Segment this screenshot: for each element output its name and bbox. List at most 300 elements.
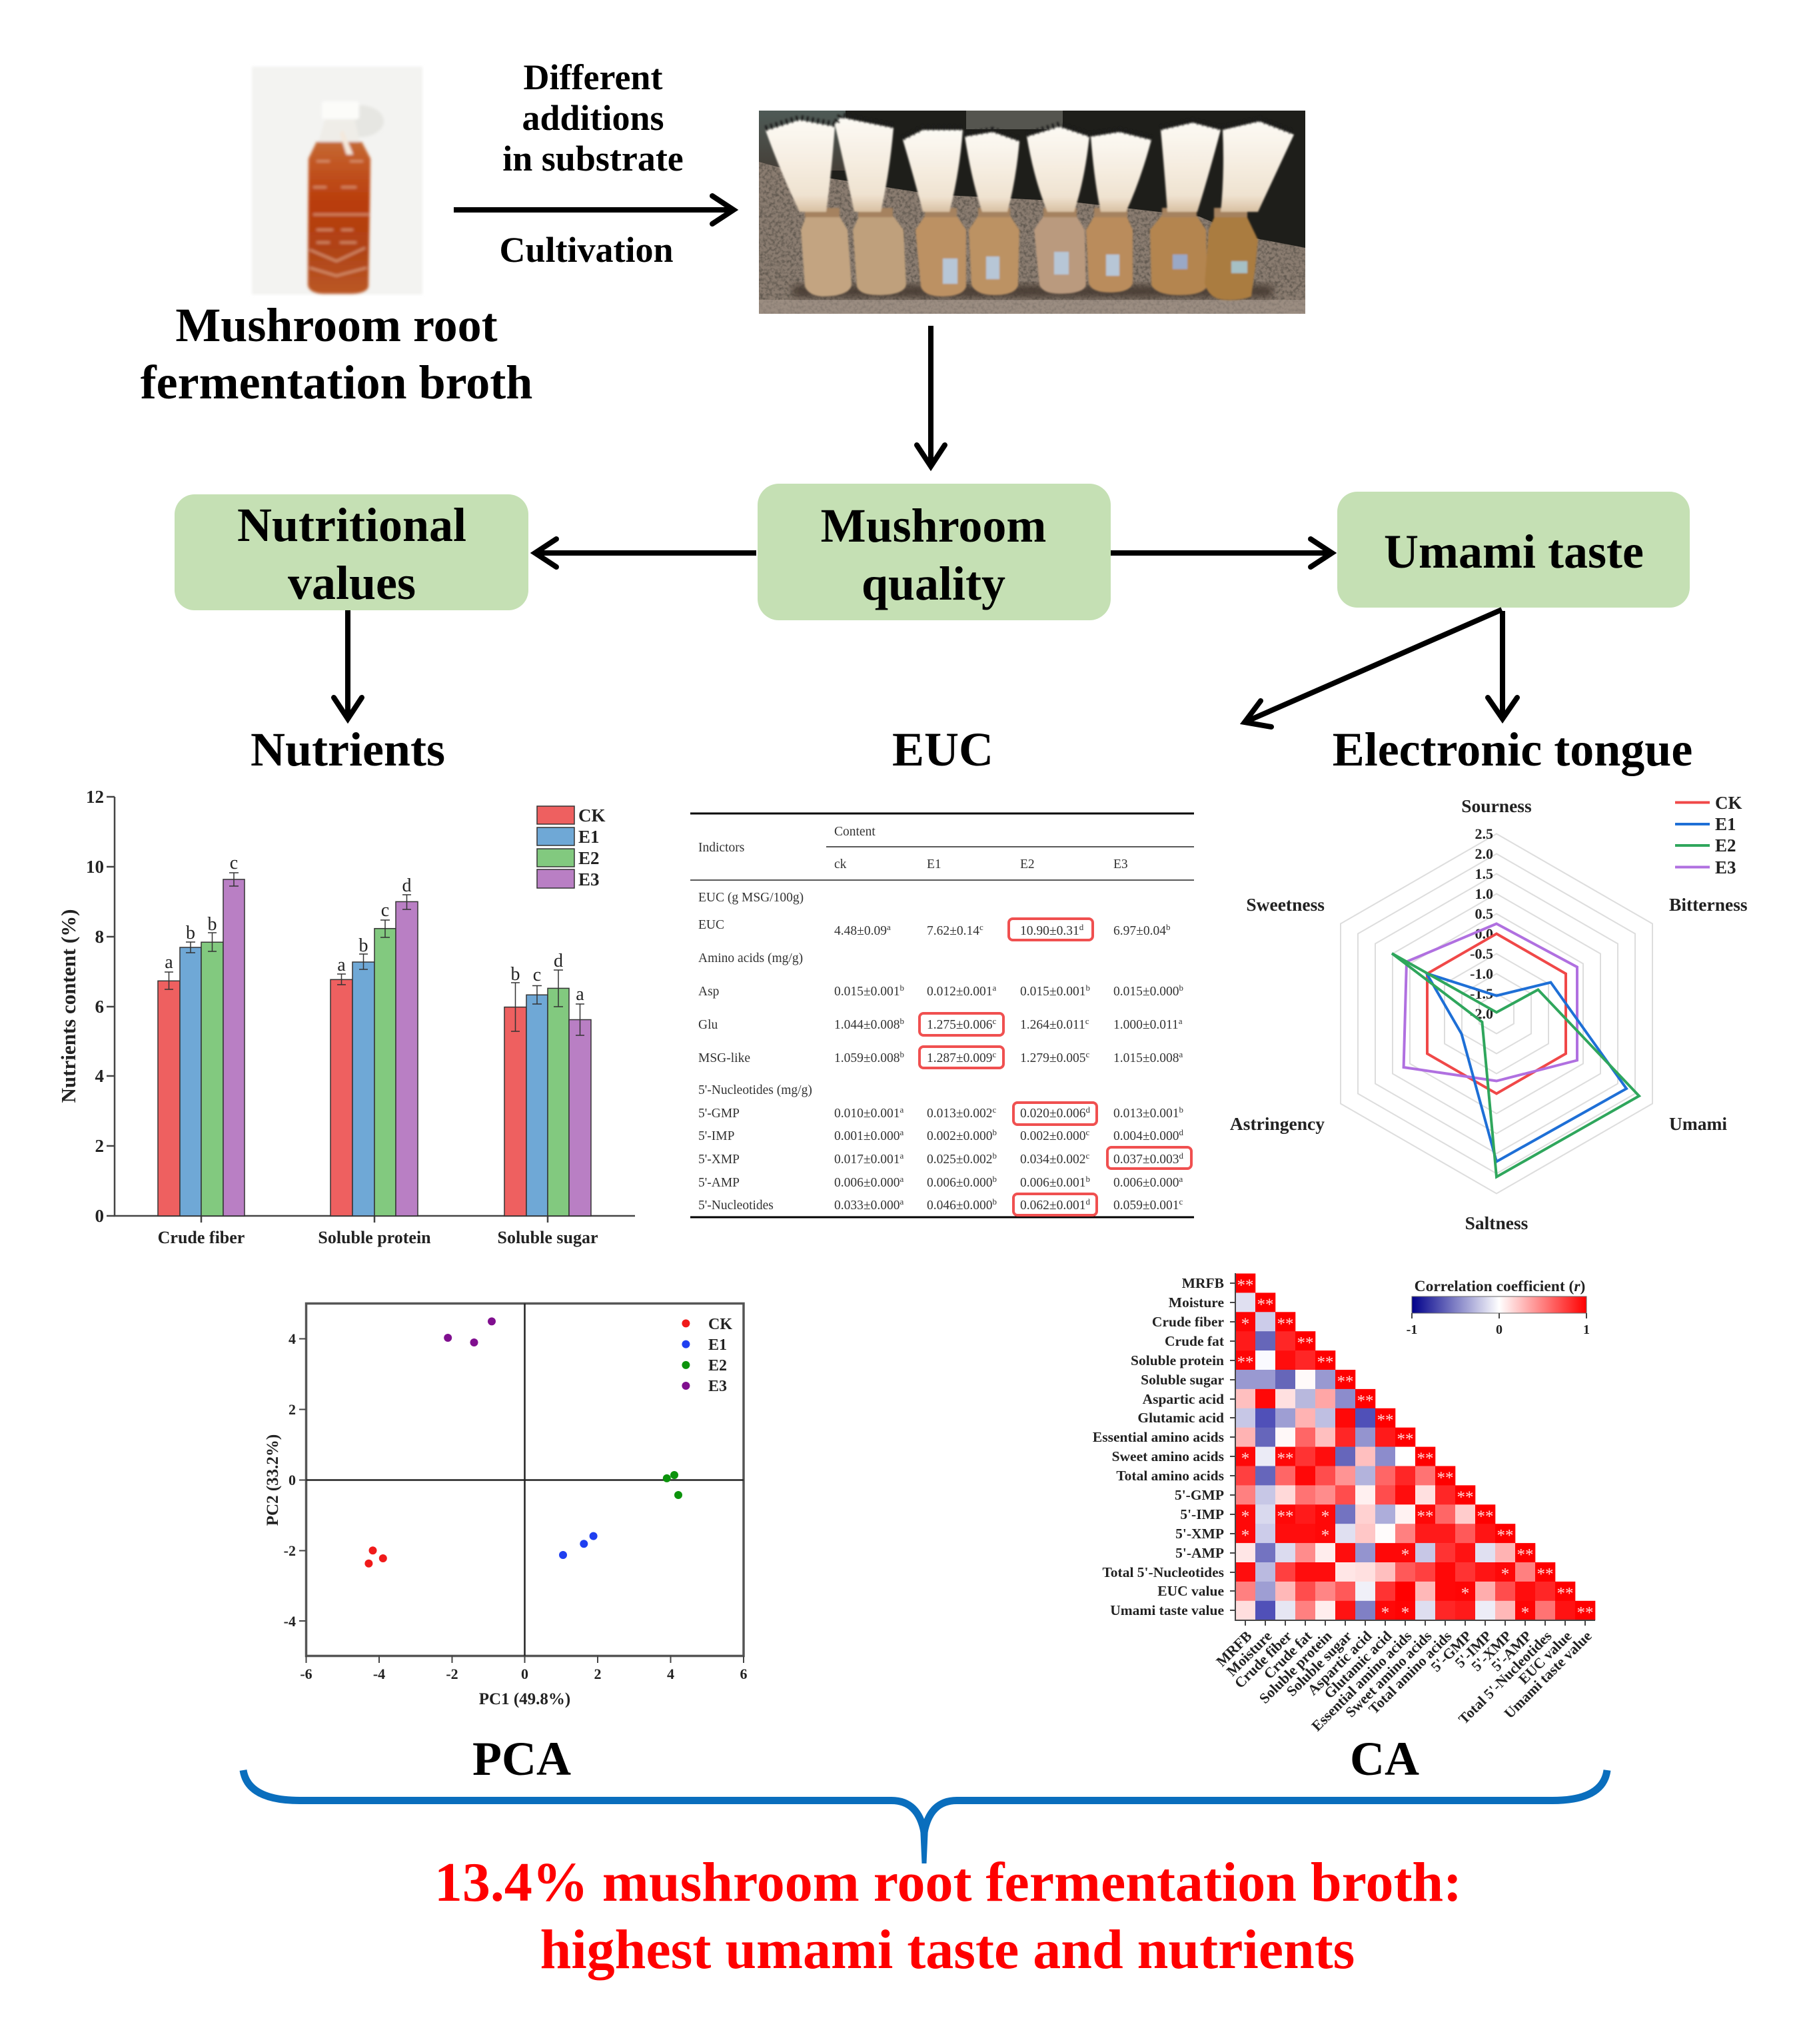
heatmap column labels: 5'-IMP [1451, 1628, 1495, 1671]
PCA y ticks: 2 [289, 1401, 296, 1418]
colour bar legend [1407, 1278, 1590, 1337]
conclusion text [434, 1851, 1462, 1981]
table rows: 0.013±0.001 [1113, 1107, 1179, 1121]
heatmap row labels: Aspartic acid [1143, 1391, 1224, 1407]
table header: Content [834, 825, 876, 839]
brace: joins PCA and CA results [243, 1770, 1607, 1863]
panel: mushroom quality: Mushroom [821, 499, 1046, 552]
legend [537, 805, 605, 889]
arrow: umami taste to EUC [1245, 610, 1502, 727]
heatmap cells: * [1321, 1527, 1329, 1545]
radar legend [1675, 793, 1742, 877]
table header: E3 [1113, 857, 1128, 871]
table rows: 0.025±0.002 [927, 1153, 992, 1167]
table rows: 0.046±0.000 [927, 1199, 992, 1213]
radar axis labels: Astringency [1230, 1113, 1325, 1134]
series: E3 [1404, 923, 1577, 1081]
table rows: 5'-AMP [698, 1176, 740, 1190]
radar grid [1341, 834, 1652, 1194]
arrow: quality to umami taste [1111, 539, 1332, 567]
table rows: 1.264±0.011 [1020, 1018, 1085, 1032]
table rows: c [1085, 1049, 1089, 1059]
table rows: a [887, 922, 891, 932]
table rows: d [1079, 922, 1084, 932]
panel: mushroom quality [758, 484, 1111, 620]
bars: soluble sugar: a [576, 984, 584, 1005]
radar legend: E3 [1715, 857, 1736, 877]
y axis with ticks: 8 [95, 927, 104, 947]
table rows: 1.000±0.011 [1113, 1018, 1179, 1032]
table header [698, 825, 1128, 871]
table rows: c [1085, 1127, 1089, 1137]
heatmap column labels: Total amino acids [1365, 1628, 1455, 1718]
table rows: 10.90±0.31 [1020, 924, 1079, 938]
heatmap cells: ** [1277, 1508, 1294, 1526]
heatmap cells: ** [1417, 1450, 1434, 1468]
y axis with ticks: 12 [86, 787, 104, 807]
PCA legend: E1 [708, 1336, 727, 1354]
table rows: 1.015±0.008 [1113, 1051, 1179, 1065]
heatmap row labels: Umami taste value [1110, 1602, 1224, 1618]
heatmap column labels: Moisture [1223, 1628, 1275, 1680]
heatmap column labels: 5'-GMP [1427, 1628, 1475, 1675]
heatmap cells: * [1241, 1508, 1249, 1526]
heatmap cells: ** [1497, 1527, 1514, 1545]
table rows: MSG-like [698, 1051, 750, 1065]
heatmap row labels: Sweet amino acids [1112, 1448, 1224, 1464]
table rows: 5'-Nucleotides (mg/g) [698, 1083, 812, 1097]
heatmap row labels: Total 5'-Nucleotides [1102, 1564, 1224, 1580]
heatmap cells: ** [1437, 1469, 1454, 1487]
table rows: a [900, 1197, 904, 1207]
table rows: 0.015±0.001 [1020, 985, 1085, 999]
table rows: 5'-Nucleotides [698, 1199, 774, 1213]
table rows: b [992, 1197, 997, 1207]
label: mushroom root fermentation broth: Mushroom root [175, 298, 498, 352]
colour bar legend: Correlation coefficient (r) [1415, 1278, 1585, 1295]
heatmap row labels: 5'-AMP [1175, 1545, 1224, 1561]
heading: CA: CA [1350, 1732, 1419, 1786]
table rows: 0.006±0.001 [1020, 1176, 1085, 1190]
radar scale [1470, 825, 1493, 1022]
radar scale: 2.0 [1475, 845, 1493, 862]
heatmap cells: ** [1297, 1334, 1314, 1352]
heatmap row labels: Moisture [1169, 1294, 1224, 1310]
legend: E2 [578, 848, 600, 868]
table rows: 0.006±0.000 [834, 1176, 900, 1190]
bottles [801, 212, 1258, 300]
table rows: d [1085, 1105, 1090, 1115]
bars: crude fiber: c [230, 853, 238, 873]
ragged mushroom caps [766, 115, 1294, 139]
table rows: 0.059±0.001 [1113, 1199, 1179, 1213]
PCA axis titles [264, 1434, 570, 1708]
y axis with ticks: 10 [86, 857, 104, 877]
table rows: EUC (g MSG/100g) [698, 891, 804, 905]
table header: Indictors [698, 841, 744, 855]
panel: nutritional values: Nutritional [237, 498, 466, 552]
radar axis labels: Sourness [1461, 795, 1532, 816]
series: E1 [1427, 973, 1626, 1162]
y axis with ticks: 2 [95, 1136, 104, 1156]
heatmap column labels: MRFB [1213, 1628, 1255, 1670]
heatmap column labels: Essential amino acids [1308, 1628, 1415, 1734]
table rows: 0.020±0.006 [1020, 1107, 1085, 1121]
y axis with ticks [86, 787, 635, 1226]
radar axis labels: Sweetness [1246, 894, 1325, 915]
radar scale: -0.5 [1470, 945, 1493, 962]
table rows: 0.034±0.002 [1020, 1153, 1085, 1167]
table rows: b [1085, 983, 1090, 993]
radar chart: electronic tongue [1230, 793, 1748, 1233]
heatmap cells: ** [1237, 1354, 1254, 1372]
heatmap column labels: Glutamic acid [1321, 1628, 1395, 1702]
heatmap row labels: Glutamic acid [1137, 1410, 1224, 1426]
heatmap row labels [1093, 1275, 1225, 1618]
label: mushroom root fermentation broth [141, 298, 532, 409]
heatmap row labels: Crude fiber [1152, 1314, 1224, 1330]
heatmap cells: * [1501, 1566, 1509, 1583]
table header: E1 [927, 857, 941, 871]
heatmap cells: ** [1377, 1411, 1394, 1429]
panel: umami taste: Umami taste [1384, 525, 1644, 578]
heatmap column labels: Crude fat [1260, 1627, 1315, 1682]
PCA axis titles: PC2 (33.2%) [264, 1434, 282, 1526]
heatmap cells: * [1401, 1604, 1409, 1622]
table rows: 6.97±0.04 [1113, 924, 1166, 938]
heatmap cells: * [1241, 1315, 1249, 1333]
radar legend: E2 [1715, 835, 1736, 855]
PCA x ticks: -6 [300, 1666, 312, 1682]
heading: electronic tongue: Electronic tongue [1333, 723, 1692, 776]
heatmap row labels: Essential amino acids [1093, 1429, 1224, 1445]
photo: bottle of mushroom root fermentation broth [252, 67, 422, 294]
table: EUC, amino acids and nucleotides [690, 813, 1194, 1217]
table rows: c [1179, 1197, 1183, 1207]
legend: E1 [578, 827, 600, 847]
label: cultivation: Cultivation [499, 230, 674, 270]
table rows: d [1085, 1197, 1090, 1207]
table rows: c [1085, 1016, 1089, 1026]
colour bar legend: 0 [1496, 1322, 1503, 1337]
radar axis labels [1230, 795, 1748, 1233]
table rows: 0.015±0.001 [834, 985, 900, 999]
table rows: 0.062±0.001 [1020, 1199, 1085, 1213]
heatmap cells: ** [1397, 1430, 1414, 1448]
radar scale: 0.5 [1475, 905, 1493, 922]
table rows: Amino acids (mg/g) [698, 951, 803, 965]
bars: soluble sugar: b [510, 964, 520, 985]
table rows: a [1179, 1016, 1183, 1026]
legend: CK [578, 805, 605, 825]
table rows: 5'-GMP [698, 1107, 740, 1121]
heatmap cells: * [1461, 1584, 1469, 1602]
category labels [158, 1228, 598, 1247]
bars: soluble protein [330, 875, 418, 1216]
category labels: Soluble protein [318, 1228, 431, 1247]
mushroom bundles [766, 117, 1294, 212]
heatmap column labels: Soluble protein [1256, 1628, 1335, 1707]
heatmap cells [1235, 1274, 1595, 1622]
table rows: b [1179, 983, 1183, 993]
PCA y ticks: -2 [284, 1542, 296, 1559]
bottle necks [805, 208, 1247, 217]
heatmap cells: ** [1277, 1450, 1294, 1468]
heatmap cells: ** [1457, 1488, 1474, 1506]
table rows: 0.033±0.000 [834, 1199, 900, 1213]
table rows: a [1179, 1174, 1183, 1184]
table rows: a [900, 1174, 904, 1184]
radar scale: 2.5 [1475, 825, 1493, 842]
table rows: c [992, 1016, 996, 1026]
table header: E2 [1020, 857, 1035, 871]
PCA legend [682, 1316, 732, 1395]
label: different additions in substrate: Different [524, 57, 662, 97]
bars: crude fiber: a [165, 952, 173, 973]
heatmap cells: ** [1576, 1604, 1594, 1622]
heatmap axes [1230, 1273, 1595, 1626]
table rows: 0.006±0.000 [927, 1176, 992, 1190]
table rows: 4.48±0.09 [834, 924, 887, 938]
bars: soluble protein: a [337, 955, 346, 975]
table rows: 0.012±0.001 [927, 985, 992, 999]
heading: EUC: EUC [892, 723, 993, 776]
heatmap cells: ** [1357, 1392, 1374, 1410]
table rows: 0.002±0.000 [927, 1129, 992, 1143]
category labels: Soluble sugar [497, 1228, 598, 1247]
table rows: b [992, 1174, 997, 1184]
heatmap column labels: Crude fiber [1231, 1628, 1295, 1692]
heatmap column labels [1213, 1627, 1595, 1734]
legend: E3 [578, 869, 600, 889]
table rows: 0.015±0.000 [1113, 985, 1179, 999]
table rows: a [992, 983, 996, 993]
heatmap cells: ** [1257, 1296, 1274, 1314]
table rows: EUC [698, 918, 724, 932]
table rows: 1.279±0.005 [1020, 1051, 1085, 1065]
heatmap row labels: Total amino acids [1116, 1468, 1224, 1484]
PCA x ticks: -2 [446, 1666, 458, 1682]
radar scale: -1.5 [1470, 985, 1493, 1002]
table rows: 0.002±0.000 [1020, 1129, 1085, 1143]
PCA x ticks: 2 [594, 1666, 601, 1682]
colour bar legend: -1 [1407, 1322, 1417, 1337]
radar scale: 0.0 [1475, 925, 1493, 942]
PCA legend: E3 [708, 1378, 727, 1395]
label: different additions in substrate [502, 57, 684, 179]
PCA points [364, 1317, 682, 1568]
table rows: d [1179, 1127, 1183, 1137]
radar axis labels: Umami [1669, 1113, 1727, 1134]
heatmap row labels: Crude fat [1165, 1333, 1225, 1349]
radar scale: 1.5 [1475, 865, 1493, 882]
table header: ck [834, 857, 847, 871]
table rows: 5'-IMP [698, 1129, 735, 1143]
table rows: a [1179, 1049, 1183, 1059]
table rows: b [992, 1127, 997, 1137]
radar scale: -2.0 [1470, 1005, 1493, 1022]
heatmap cells: * [1521, 1604, 1529, 1622]
PCA x ticks: -4 [373, 1666, 385, 1682]
heatmap column labels: Sweet amino acids [1342, 1628, 1435, 1720]
radar scale: 1.0 [1475, 885, 1493, 902]
heatmap column labels: 5'-XMP [1468, 1628, 1515, 1674]
conclusion text: highest umami taste and nutrients [540, 1919, 1355, 1981]
PCA legend: CK [708, 1316, 732, 1333]
heatmap cells: ** [1556, 1584, 1574, 1602]
table rows: c [1085, 1151, 1089, 1161]
label: different additions in substrate: additions [522, 98, 664, 138]
series: E2 [1392, 953, 1639, 1177]
panel: mushroom quality: quality [862, 557, 1005, 610]
radar scale: -1.0 [1470, 965, 1493, 982]
label: different additions in substrate: in substrate [502, 139, 684, 179]
radar legend: CK [1715, 793, 1742, 813]
heatmap cells: * [1321, 1508, 1329, 1526]
table rows [698, 891, 1183, 1213]
table rows: c [992, 1049, 996, 1059]
y axis with ticks: 6 [95, 997, 104, 1017]
bottle labels [943, 252, 1247, 284]
bars: soluble sugar [504, 951, 591, 1216]
heatmap: correlation analysis [1093, 1273, 1595, 1734]
heatmap row labels: 5'-GMP [1175, 1487, 1224, 1503]
heatmap column labels: Total 5'-Nucleotides [1455, 1628, 1555, 1728]
bar chart: nutrients content [57, 787, 635, 1247]
table rows: b [992, 1151, 997, 1161]
heatmap column labels: Aspartic acid [1304, 1628, 1375, 1698]
radar axis labels: Bitterness [1669, 894, 1748, 915]
table rows: b [1166, 922, 1170, 932]
table rows: a [900, 1105, 904, 1115]
bars: soluble sugar: c [533, 965, 541, 985]
table rows: b [900, 1049, 904, 1059]
arrow: quality to nutritional values [535, 539, 756, 567]
bars: crude fiber: b [208, 914, 217, 935]
PCA y ticks: 0 [289, 1472, 296, 1488]
table rows: d [1179, 1151, 1183, 1161]
table rows: a [900, 1151, 904, 1161]
table rows: c [992, 1105, 996, 1115]
PCA axis titles: PC1 (49.8%) [479, 1690, 570, 1708]
heatmap column labels: EUC value [1515, 1628, 1575, 1688]
heatmap row labels: Soluble protein [1131, 1352, 1224, 1368]
heatmap row labels: 5'-XMP [1175, 1526, 1224, 1542]
table rows: 0.017±0.001 [834, 1153, 900, 1167]
heading: nutrients: Nutrients [251, 723, 445, 776]
table rows: 1.287±0.009 [927, 1051, 992, 1065]
heatmap row labels: 5'-IMP [1180, 1506, 1224, 1522]
bars: soluble sugar: d [554, 951, 563, 971]
PCA y ticks: 4 [289, 1330, 296, 1347]
heatmap column labels: Umami taste value [1501, 1628, 1595, 1722]
heatmap cells: ** [1477, 1508, 1494, 1526]
heading: PCA: PCA [472, 1732, 571, 1786]
table rows: 0.013±0.002 [927, 1107, 992, 1121]
PCA y ticks: -4 [284, 1613, 296, 1630]
table rows: 1.059±0.008 [834, 1051, 900, 1065]
bars: crude fiber [158, 853, 245, 1216]
conclusion text: 13.4% mushroom root fermentation broth: [434, 1851, 1462, 1913]
heatmap cells: * [1401, 1546, 1409, 1564]
table rows: 1.044±0.008 [834, 1018, 900, 1032]
heatmap column labels: 5'-AMP [1488, 1628, 1535, 1674]
photo: cultivated enoki mushrooms in bottles [759, 111, 1305, 314]
table rows: 1.275±0.006 [927, 1018, 992, 1032]
table rows: b [900, 983, 904, 993]
table rows: 0.001±0.000 [834, 1129, 900, 1143]
table rows: 0.037±0.003 [1113, 1153, 1179, 1167]
highlight boxes [919, 919, 1191, 1215]
table rows: a [900, 1127, 904, 1137]
series: CK [1427, 934, 1566, 1094]
table rows: b [1085, 1174, 1090, 1184]
category labels: Crude fiber [158, 1228, 245, 1247]
PCA x ticks: 6 [740, 1666, 748, 1682]
bars: crude fiber: b [186, 923, 195, 943]
arrow: umami taste to electronic tongue [1488, 611, 1517, 719]
arrow: broth to cultivation [454, 196, 734, 224]
table rows: 0.004±0.000 [1113, 1129, 1179, 1143]
heatmap row labels: MRFB [1182, 1275, 1224, 1291]
y axis with ticks: 0 [95, 1206, 104, 1226]
table rows: b [900, 1016, 904, 1026]
scatter plot: PCA [264, 1303, 748, 1708]
heatmap cells: ** [1237, 1277, 1254, 1294]
table rows: Glu [698, 1018, 718, 1032]
PCA x ticks [300, 1666, 748, 1682]
label: mushroom root fermentation broth: fermentation broth [141, 356, 532, 409]
bars: soluble protein: b [358, 935, 368, 956]
heatmap row labels: Soluble sugar [1141, 1372, 1224, 1388]
heatmap cells: ** [1277, 1315, 1294, 1333]
PCA y ticks [284, 1330, 296, 1630]
table rows: Asp [698, 985, 719, 999]
heatmap cells: ** [1516, 1546, 1534, 1564]
bars: soluble protein: c [381, 900, 389, 921]
radar axis labels: Saltness [1465, 1213, 1528, 1233]
PCA x ticks: 0 [521, 1666, 528, 1682]
heatmap row labels: EUC value [1157, 1583, 1224, 1599]
table rows: 0.006±0.000 [1113, 1176, 1179, 1190]
heatmap cells: * [1241, 1527, 1249, 1545]
colour bar legend: 1 [1583, 1322, 1590, 1337]
PCA legend: E2 [708, 1357, 727, 1374]
bars: soluble protein: d [402, 875, 412, 896]
panel: nutritional values: values [288, 556, 416, 610]
table rows: 0.010±0.001 [834, 1107, 900, 1121]
heatmap cells: ** [1317, 1354, 1334, 1372]
table rows: c [979, 922, 983, 932]
y axis title: Nutrients content (%) [57, 909, 80, 1103]
arrow: photo down to mushroom quality [917, 326, 945, 466]
heatmap cells: * [1241, 1450, 1249, 1468]
panel: umami taste [1337, 492, 1690, 608]
table rows: 7.62±0.14 [927, 924, 979, 938]
table rows: b [1179, 1105, 1183, 1115]
PCA x ticks: 4 [667, 1666, 674, 1682]
heatmap column labels: Soluble sugar [1283, 1628, 1355, 1700]
heatmap cells: * [1381, 1604, 1389, 1622]
heatmap cells: ** [1536, 1566, 1554, 1583]
y axis with ticks: 4 [95, 1066, 104, 1086]
radar legend: E1 [1715, 814, 1736, 834]
table rows: 5'-XMP [698, 1153, 740, 1167]
heatmap cells: ** [1337, 1372, 1354, 1391]
panel: nutritional values [175, 494, 528, 610]
heatmap cells: ** [1417, 1508, 1434, 1526]
arrow: nutritional values to nutrients [334, 610, 362, 719]
